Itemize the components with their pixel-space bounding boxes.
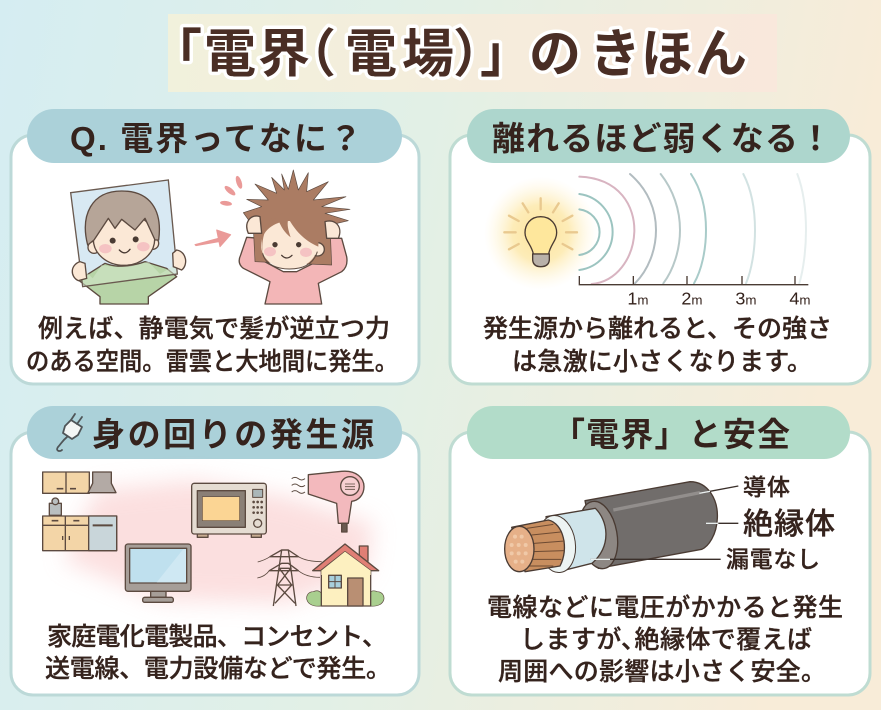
heading: Q: Q. 電界ってなに？ — [70, 120, 362, 157]
text block — [483, 315, 832, 376]
leader lines — [591, 486, 738, 559]
text block: 電線などに電圧がかかると発生 — [487, 594, 843, 622]
icon: girl — [239, 170, 350, 304]
heading: 「電界」と安全 — [552, 416, 790, 453]
icon: microwave — [192, 483, 266, 537]
diagram: cable cross section — [505, 482, 738, 575]
text block — [45, 623, 391, 683]
text block: 発生源から離れると、その強さ — [483, 315, 832, 343]
distance axis: 2m — [681, 289, 702, 309]
arrow — [195, 230, 231, 247]
panel: weakens with distance — [450, 109, 870, 384]
heading: 離れるほど弱くなる！ — [492, 120, 832, 157]
icon: surprise marks — [220, 175, 244, 206]
panel: sources around us — [11, 406, 419, 695]
icon: hair dryer — [292, 471, 364, 532]
text block: は急激に小さくなります。 — [512, 348, 812, 376]
copper conductor — [512, 520, 564, 572]
text block: のある空間。雷雲と大地間に発生。 — [26, 348, 398, 376]
pink field glow — [63, 480, 373, 603]
label: insulator: 絶縁体 — [743, 508, 835, 541]
panel: field and safety — [450, 406, 870, 695]
text block: 家庭電化電製品、コンセント、 — [47, 623, 387, 651]
text block — [26, 315, 398, 376]
cable collar — [574, 498, 623, 572]
distance axis: 1m — [627, 289, 648, 309]
heading — [467, 406, 850, 459]
text block: 周囲への影響は小さく安全。 — [498, 658, 826, 686]
icon: kitchen — [43, 472, 117, 551]
icon: transmission tower — [257, 550, 322, 606]
icon: television — [125, 544, 191, 602]
illustration: household sources — [43, 471, 384, 606]
icon: plug — [57, 414, 82, 451]
text block — [487, 594, 843, 686]
cable insulation — [546, 508, 606, 572]
waves — [579, 174, 806, 284]
distance axis — [579, 276, 810, 309]
icon: film sheet — [71, 180, 177, 287]
icon: light bulb — [484, 177, 597, 290]
text block: 送電線、電力設備などで発生。 — [45, 655, 391, 683]
distance axis: 3m — [735, 289, 756, 309]
diagram: light bulb and distance waves — [484, 174, 810, 309]
distance axis: 4m — [789, 289, 810, 309]
title: 「電界（電場）」のきほん — [150, 26, 747, 84]
heading: 身の回りの発生源 — [92, 416, 374, 453]
text block: 例えば、静電気で髪が逆立つ力 — [38, 315, 390, 343]
label: no leakage: 漏電なし — [726, 546, 820, 572]
heading — [27, 406, 402, 459]
cable jacket — [585, 482, 717, 568]
heading: Q — [27, 109, 402, 163]
illustration: boy with film and girl with static hair — [71, 170, 350, 304]
heading — [467, 109, 850, 163]
icon: boy — [78, 191, 177, 304]
icon: house — [307, 544, 384, 606]
text block: しますが､絶縁体で覆えば — [520, 626, 812, 654]
panel: what is an electric field — [11, 109, 419, 384]
label: conductor: 導体 — [743, 474, 790, 500]
